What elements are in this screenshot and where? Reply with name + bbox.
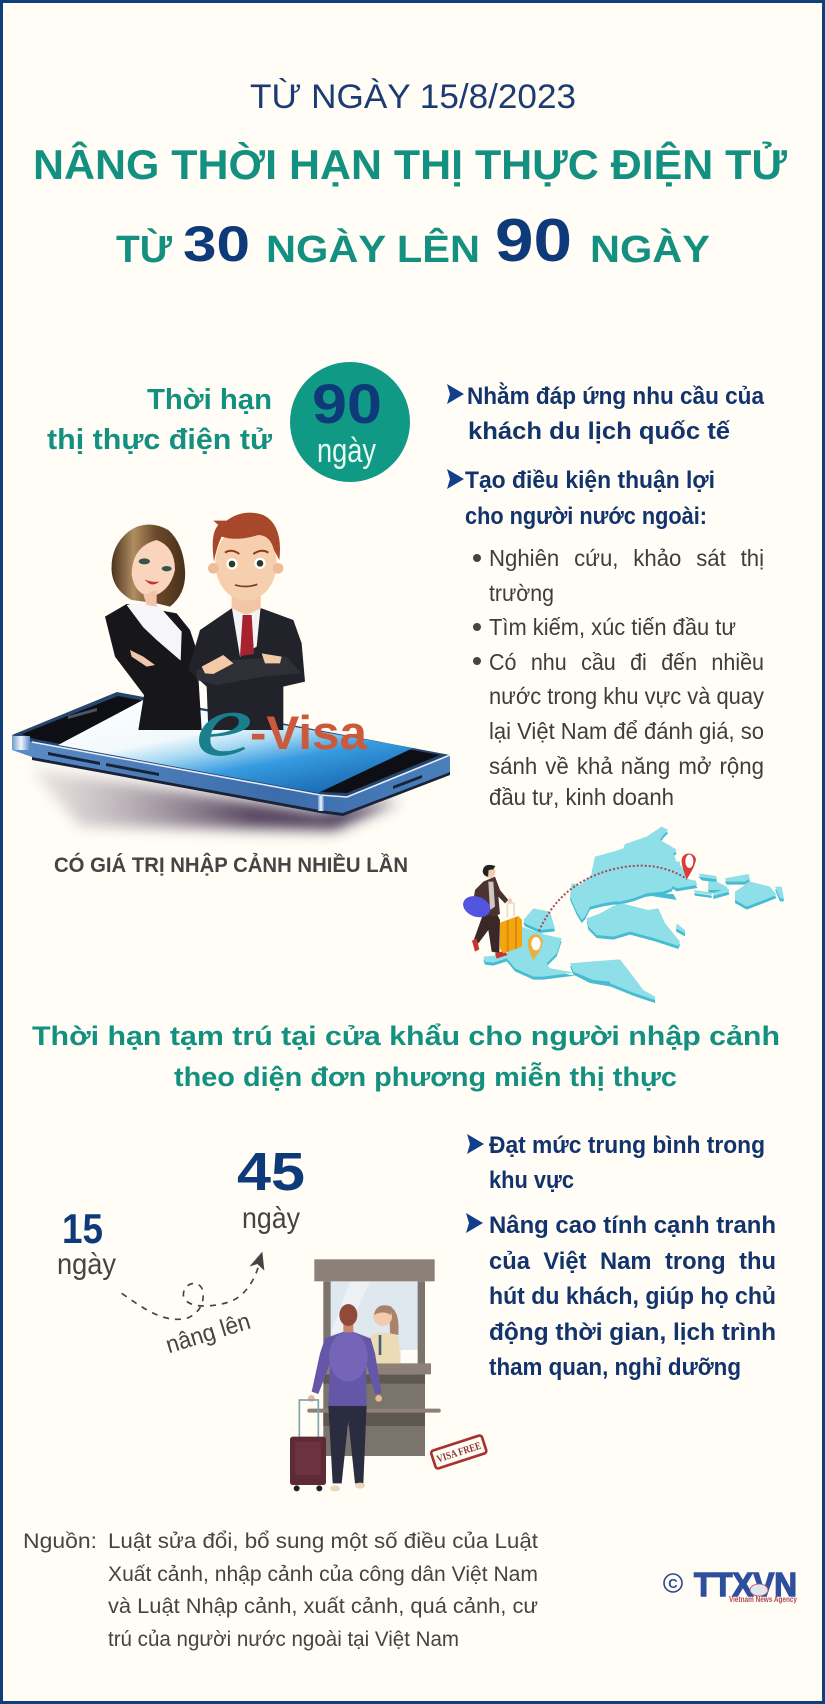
section heading: temporary residence: Thời hạn tạm trú tại cửa khẩu cho người nhập cảnh	[32, 1021, 780, 1051]
bullet text: conditions	[465, 467, 715, 530]
bullet text: conditions: cho người nước ngoài:	[465, 503, 707, 530]
illustration: traveller at border booth	[290, 1259, 487, 1491]
bullet text: competitiveness: động thời gian, lịch trình	[489, 1319, 776, 1346]
sub-list of foreigners' needs: trường	[489, 580, 554, 606]
sub-list of foreigners' needs: đầu tư, kinh doanh	[489, 784, 674, 810]
sub-list of foreigners' needs: Tìm kiếm, xúc tiến đầu tư	[489, 614, 736, 640]
bullet text: purpose: Nhằm đáp ứng nhu cầu của	[467, 382, 765, 410]
pin: origin	[528, 934, 543, 960]
bullet text: purpose	[467, 382, 765, 445]
title: 30 to 90 days: 90	[495, 207, 572, 274]
illustration: world map	[483, 827, 784, 1003]
bullet text: competitiveness	[489, 1212, 776, 1381]
e-visa duration label	[47, 384, 272, 456]
bullet text: regional average	[489, 1132, 765, 1194]
bullet text: competitiveness: hút du khách, giúp họ chủ	[489, 1283, 776, 1310]
bullet text: regional average: Đạt mức trung bình trong	[489, 1132, 765, 1159]
e-visa duration label: Thời hạn	[147, 384, 272, 416]
woman figure	[105, 525, 202, 730]
e-Visa logo text: -Visa	[250, 706, 368, 759]
traveller from behind	[308, 1304, 382, 1491]
stat: 15 days: ngày	[57, 1248, 116, 1281]
source note: và Luật Nhập cảnh, xuất cảnh, quá cảnh, cư	[108, 1595, 538, 1618]
stat: 45 days: ngày	[242, 1202, 300, 1235]
illustration: two business people	[105, 513, 305, 730]
sub-list of foreigners' needs: lại Việt Nam để đánh giá, so	[489, 718, 764, 744]
logo: TTXVN: TTXVN	[694, 1566, 797, 1603]
arrow bullet 3	[467, 1134, 484, 1154]
badge: 90 days: 90	[312, 372, 382, 435]
bullet text: purpose: khách du lịch quốc tế	[468, 418, 731, 445]
caption: multiple entry: CÓ GIÁ TRỊ NHẬP CẢNH NHIỀU LẦN	[54, 853, 408, 877]
dashed arrow rising	[122, 1252, 264, 1319]
source note	[23, 1530, 538, 1651]
sub-list of foreigners' needs: sánh về khả năng mở rộng	[489, 753, 764, 779]
source note: trú của người nước ngoài tại Việt Nam	[108, 1628, 459, 1651]
title: 30 to 90 days: NGÀY	[590, 227, 710, 271]
bullet text: conditions: Tạo điều kiện thuận lợi	[465, 467, 715, 494]
sub-list of foreigners' needs	[473, 545, 764, 810]
section heading: temporary residence: theo diện đơn phương miễn thị thực	[174, 1061, 677, 1092]
sub-list of foreigners' needs: nước trong khu vực và quay	[489, 683, 764, 709]
booth officer	[370, 1305, 401, 1363]
title: date line: TỪ NGÀY 15/8/2023	[250, 78, 576, 116]
title: 30 to 90 days: TỪ	[116, 227, 172, 271]
arrow bullet 2	[447, 469, 464, 489]
title: main line: NÂNG THỜI HẠN THỊ THỰC ĐIỆN TỬ	[33, 140, 787, 188]
badge: 90 days: ngày	[317, 432, 376, 470]
arrow bullet 4	[466, 1213, 483, 1233]
bullet text: regional average: khu vực	[489, 1167, 574, 1194]
source note: Luật sửa đổi, bổ sung một số điều của Luật	[108, 1530, 538, 1553]
source note: Xuất cảnh, nhập cảnh của công dân Việt Nam	[108, 1563, 538, 1586]
bullet text: competitiveness: Nâng cao tính cạnh tranh	[489, 1212, 776, 1239]
sub-list of foreigners' needs: Nghiên cứu, khảo sát thị	[489, 545, 764, 571]
source note: Nguồn:	[23, 1530, 97, 1553]
bullet text: competitiveness: tham quan, nghỉ dưỡng	[489, 1354, 741, 1381]
section heading: temporary residence	[32, 1021, 780, 1092]
illustration: phone	[12, 692, 450, 830]
man figure	[188, 513, 305, 730]
stamp: visa free: VISA FREE	[436, 1441, 483, 1465]
pin: destination	[682, 854, 696, 879]
sub-list of foreigners' needs: Có nhu cầu đi đến nhiều	[489, 649, 764, 675]
label: raised to: nâng lên	[163, 1308, 254, 1359]
e-visa duration label: thị thực điện tử	[47, 424, 272, 456]
suitcase	[290, 1400, 326, 1491]
e-Visa logo text: e	[195, 676, 253, 775]
traveller figure	[460, 865, 522, 959]
booth	[307, 1259, 441, 1456]
stat: 15 days	[57, 1205, 116, 1281]
arrow bullet 1	[447, 384, 464, 404]
title: 30 to 90 days	[116, 207, 710, 274]
bullet text: competitiveness: của Việt Nam trong thu	[489, 1248, 776, 1275]
stat: 45 days: 45	[237, 1142, 305, 1202]
stat: 45 days	[237, 1142, 305, 1235]
stamp: visa free	[431, 1435, 487, 1469]
badge: 90 days	[290, 362, 410, 482]
logo: TTXVN: C	[668, 1576, 678, 1591]
e-Visa logo text	[195, 676, 368, 775]
logo: TTXVN: Vietnam News Agency	[729, 1595, 797, 1604]
title: 30 to 90 days: NGÀY LÊN	[266, 227, 480, 271]
title: 30 to 90 days: 30	[183, 216, 250, 272]
stat: 15 days: 15	[62, 1205, 103, 1252]
